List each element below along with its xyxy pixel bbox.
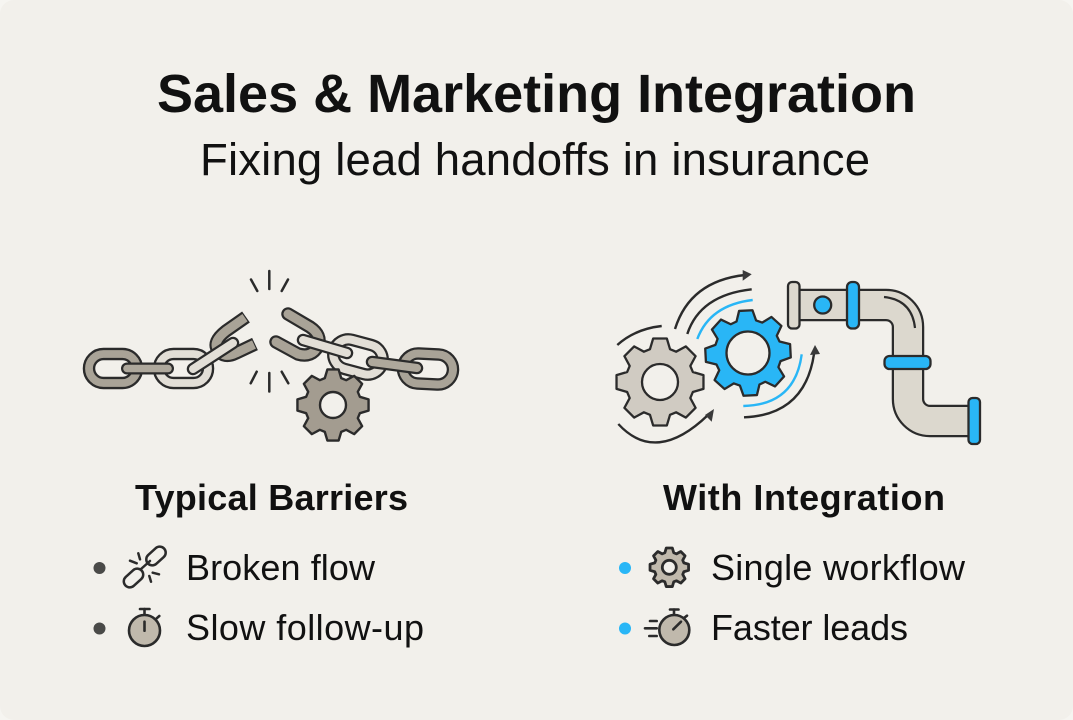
title: Sales & Marketing Integration bbox=[157, 64, 916, 124]
gear: blue bbox=[703, 308, 793, 398]
bullet: slow follow-up bbox=[94, 622, 106, 634]
subtitle: Fixing lead handoffs in insurance bbox=[200, 134, 870, 185]
label: single workflow: Single workflow bbox=[711, 547, 966, 588]
pipe top band bbox=[847, 282, 859, 328]
chain link 4 bbox=[402, 353, 454, 385]
diagonal bar left bbox=[193, 343, 233, 369]
gear: grey bbox=[617, 339, 703, 425]
broken link right bbox=[276, 314, 319, 355]
label: slow follow-up: Slow follow-up bbox=[186, 607, 424, 648]
pipe gauge dot bbox=[814, 296, 831, 314]
diagonal bar right bbox=[303, 340, 347, 353]
connector bar right bbox=[372, 362, 417, 368]
icon: stopwatch bbox=[129, 609, 160, 646]
bullet: single workflow bbox=[619, 562, 631, 574]
heading: with integration: With Integration bbox=[663, 477, 945, 518]
icon: small gear bbox=[650, 548, 689, 587]
pipe end flange bbox=[968, 398, 980, 444]
icon: broken link bbox=[121, 544, 168, 590]
arrow: top arc bbox=[675, 270, 752, 329]
label: faster leads: Faster leads bbox=[711, 607, 908, 648]
pipe middle band bbox=[884, 356, 930, 369]
pipe left flange bbox=[788, 282, 800, 328]
arrow: right arc bbox=[744, 345, 820, 417]
chain link 3 bbox=[330, 336, 386, 378]
chain link 1 bbox=[89, 354, 137, 383]
bullet: faster leads bbox=[619, 622, 631, 634]
illustration: broken chain with gear bbox=[89, 271, 454, 441]
gear: jammed in chain bbox=[297, 369, 369, 441]
heading: typical barriers: Typical Barriers bbox=[135, 477, 408, 518]
arrow: bottom arc bbox=[618, 409, 714, 442]
label: broken flow: Broken flow bbox=[186, 547, 376, 588]
break sparks bbox=[251, 271, 288, 392]
broken link left bbox=[216, 317, 255, 355]
illustration: gears and pipeline bbox=[617, 270, 980, 444]
motion arcs upper bbox=[617, 289, 753, 345]
chain link 2 bbox=[159, 354, 208, 383]
connector bar left bbox=[127, 362, 168, 374]
icon: fast stopwatch bbox=[645, 610, 689, 645]
motion arc lower blue bbox=[743, 354, 802, 406]
pipe bbox=[795, 297, 972, 421]
bullet: broken flow bbox=[94, 562, 106, 574]
